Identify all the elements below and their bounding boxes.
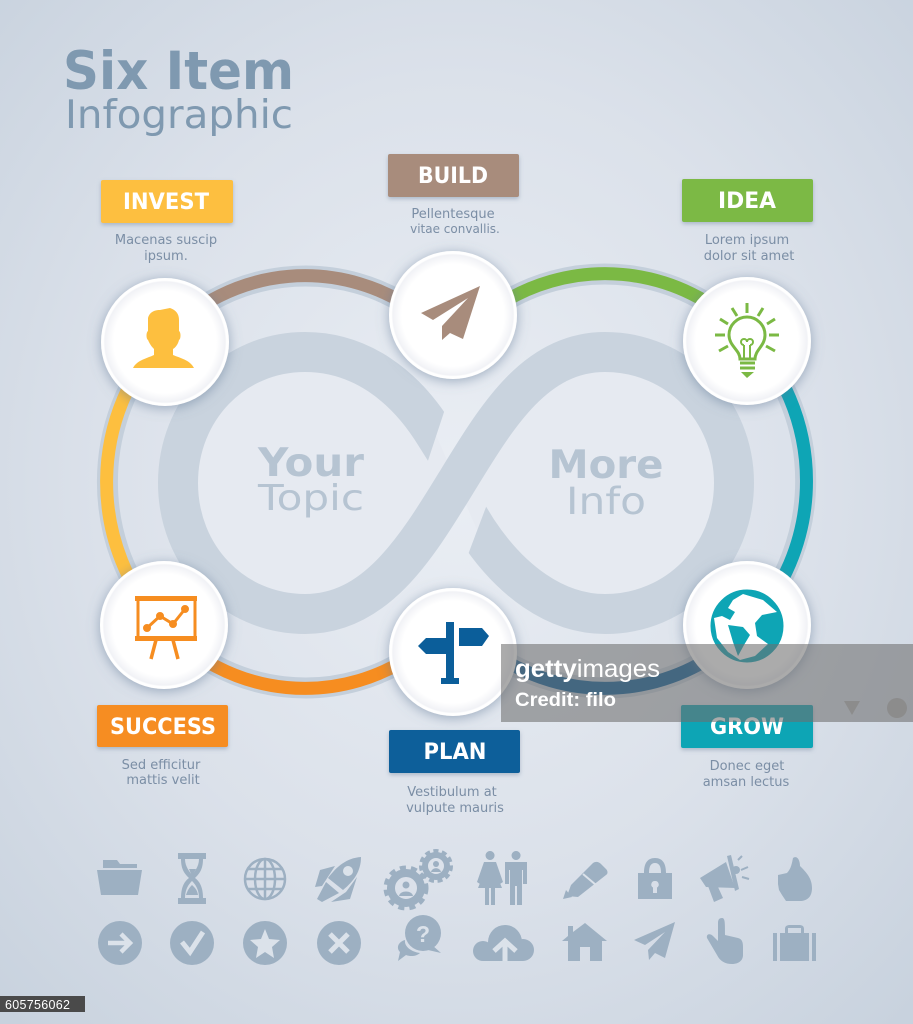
coloured ring segments xyxy=(107,274,806,688)
image id tag: 605756062 xyxy=(5,998,70,1012)
icon: pencil xyxy=(563,862,608,899)
label: success xyxy=(97,705,228,747)
label: idea xyxy=(682,179,813,222)
centre text: more info xyxy=(548,443,664,523)
text: success description: mattis velit xyxy=(126,773,200,788)
icon: light bulb xyxy=(715,303,779,378)
text: invest description: Macenas suscip xyxy=(115,233,217,248)
icon: briefcase xyxy=(773,925,816,961)
icon: star circle xyxy=(243,921,287,965)
icon: rocket xyxy=(315,857,361,902)
text: grow description: Donec eget xyxy=(710,759,784,774)
centre text: more info: Info xyxy=(566,480,646,523)
title: Infographic xyxy=(65,93,293,138)
icon: globe xyxy=(712,591,782,661)
icon: house xyxy=(562,923,607,961)
centre text: your topic: Your xyxy=(257,441,365,486)
label: build xyxy=(388,154,519,197)
label: plan xyxy=(389,730,520,773)
icon: gears xyxy=(386,851,451,908)
label: invest xyxy=(101,180,233,223)
text: idea description: Lorem ipsum xyxy=(705,233,789,248)
label: success: SUCCESS xyxy=(110,715,216,740)
node: success xyxy=(100,561,228,689)
node: build xyxy=(389,251,517,379)
centre text: your topic: Topic xyxy=(257,478,364,519)
icon: hourglass sand xyxy=(186,869,198,895)
text: idea description: dolor sit amet xyxy=(704,249,794,264)
icon: check circle xyxy=(170,921,214,965)
icon: small plane xyxy=(634,922,675,960)
title: Six Item xyxy=(63,41,294,102)
label: idea: IDEA xyxy=(718,189,776,214)
text: invest description: ipsum. xyxy=(144,249,188,264)
icon: people xyxy=(477,851,527,905)
icon: signpost xyxy=(418,622,489,684)
icon: question chat xyxy=(398,915,441,961)
watermark band xyxy=(501,644,913,722)
node: idea xyxy=(683,277,811,405)
node: invest xyxy=(101,278,229,406)
icon: x circle xyxy=(317,921,361,965)
arc: orange xyxy=(162,625,420,688)
icon: thumbs up xyxy=(778,857,812,901)
arc: yellow xyxy=(107,336,165,625)
credit text: Credit: filo xyxy=(515,690,616,711)
icon: arrow circle xyxy=(98,921,142,965)
text: build description: Pellentesque xyxy=(411,207,495,222)
infinity symbol xyxy=(178,352,734,614)
icon: person xyxy=(133,308,194,368)
label: invest: INVEST xyxy=(123,190,209,215)
watermark glyphs xyxy=(844,701,860,715)
centre text: more info: More xyxy=(548,443,664,488)
icon: cloud upload xyxy=(473,925,534,961)
watermark text: gettyimages xyxy=(515,655,660,683)
icon: question chat: ? xyxy=(416,921,430,947)
ring halos xyxy=(107,274,806,688)
arc: teal xyxy=(747,334,806,628)
centre text: your topic xyxy=(257,441,365,519)
arc: green xyxy=(490,274,747,334)
label: grow xyxy=(681,705,813,748)
text: plan description: Vestibulum at xyxy=(407,785,497,800)
icon: pointing hand xyxy=(707,918,743,964)
text: success description: Sed efficitur xyxy=(122,758,201,773)
label: plan: PLAN xyxy=(424,740,486,765)
icon: paper plane xyxy=(421,286,480,340)
title xyxy=(63,41,294,138)
icon: presentation board xyxy=(135,598,197,659)
label: build: BUILD xyxy=(418,164,488,189)
label: grow: GROW xyxy=(710,715,784,740)
icon: lock xyxy=(638,858,672,899)
arc: brown xyxy=(165,276,420,336)
text: build description: vitae convallis. xyxy=(410,222,500,236)
arc: blue xyxy=(490,628,747,688)
icon: hourglass xyxy=(178,853,206,904)
node: grow xyxy=(683,561,811,689)
text: grow description: amsan lectus xyxy=(703,775,790,790)
icon: megaphone xyxy=(700,855,749,902)
text: plan description: vulpute mauris xyxy=(406,801,504,816)
node: plan xyxy=(389,588,517,716)
icon set xyxy=(97,851,816,965)
image id tag xyxy=(0,996,85,1012)
icon: wire globe xyxy=(245,859,285,899)
icon: folder xyxy=(97,860,142,895)
centre light fill xyxy=(178,352,734,614)
